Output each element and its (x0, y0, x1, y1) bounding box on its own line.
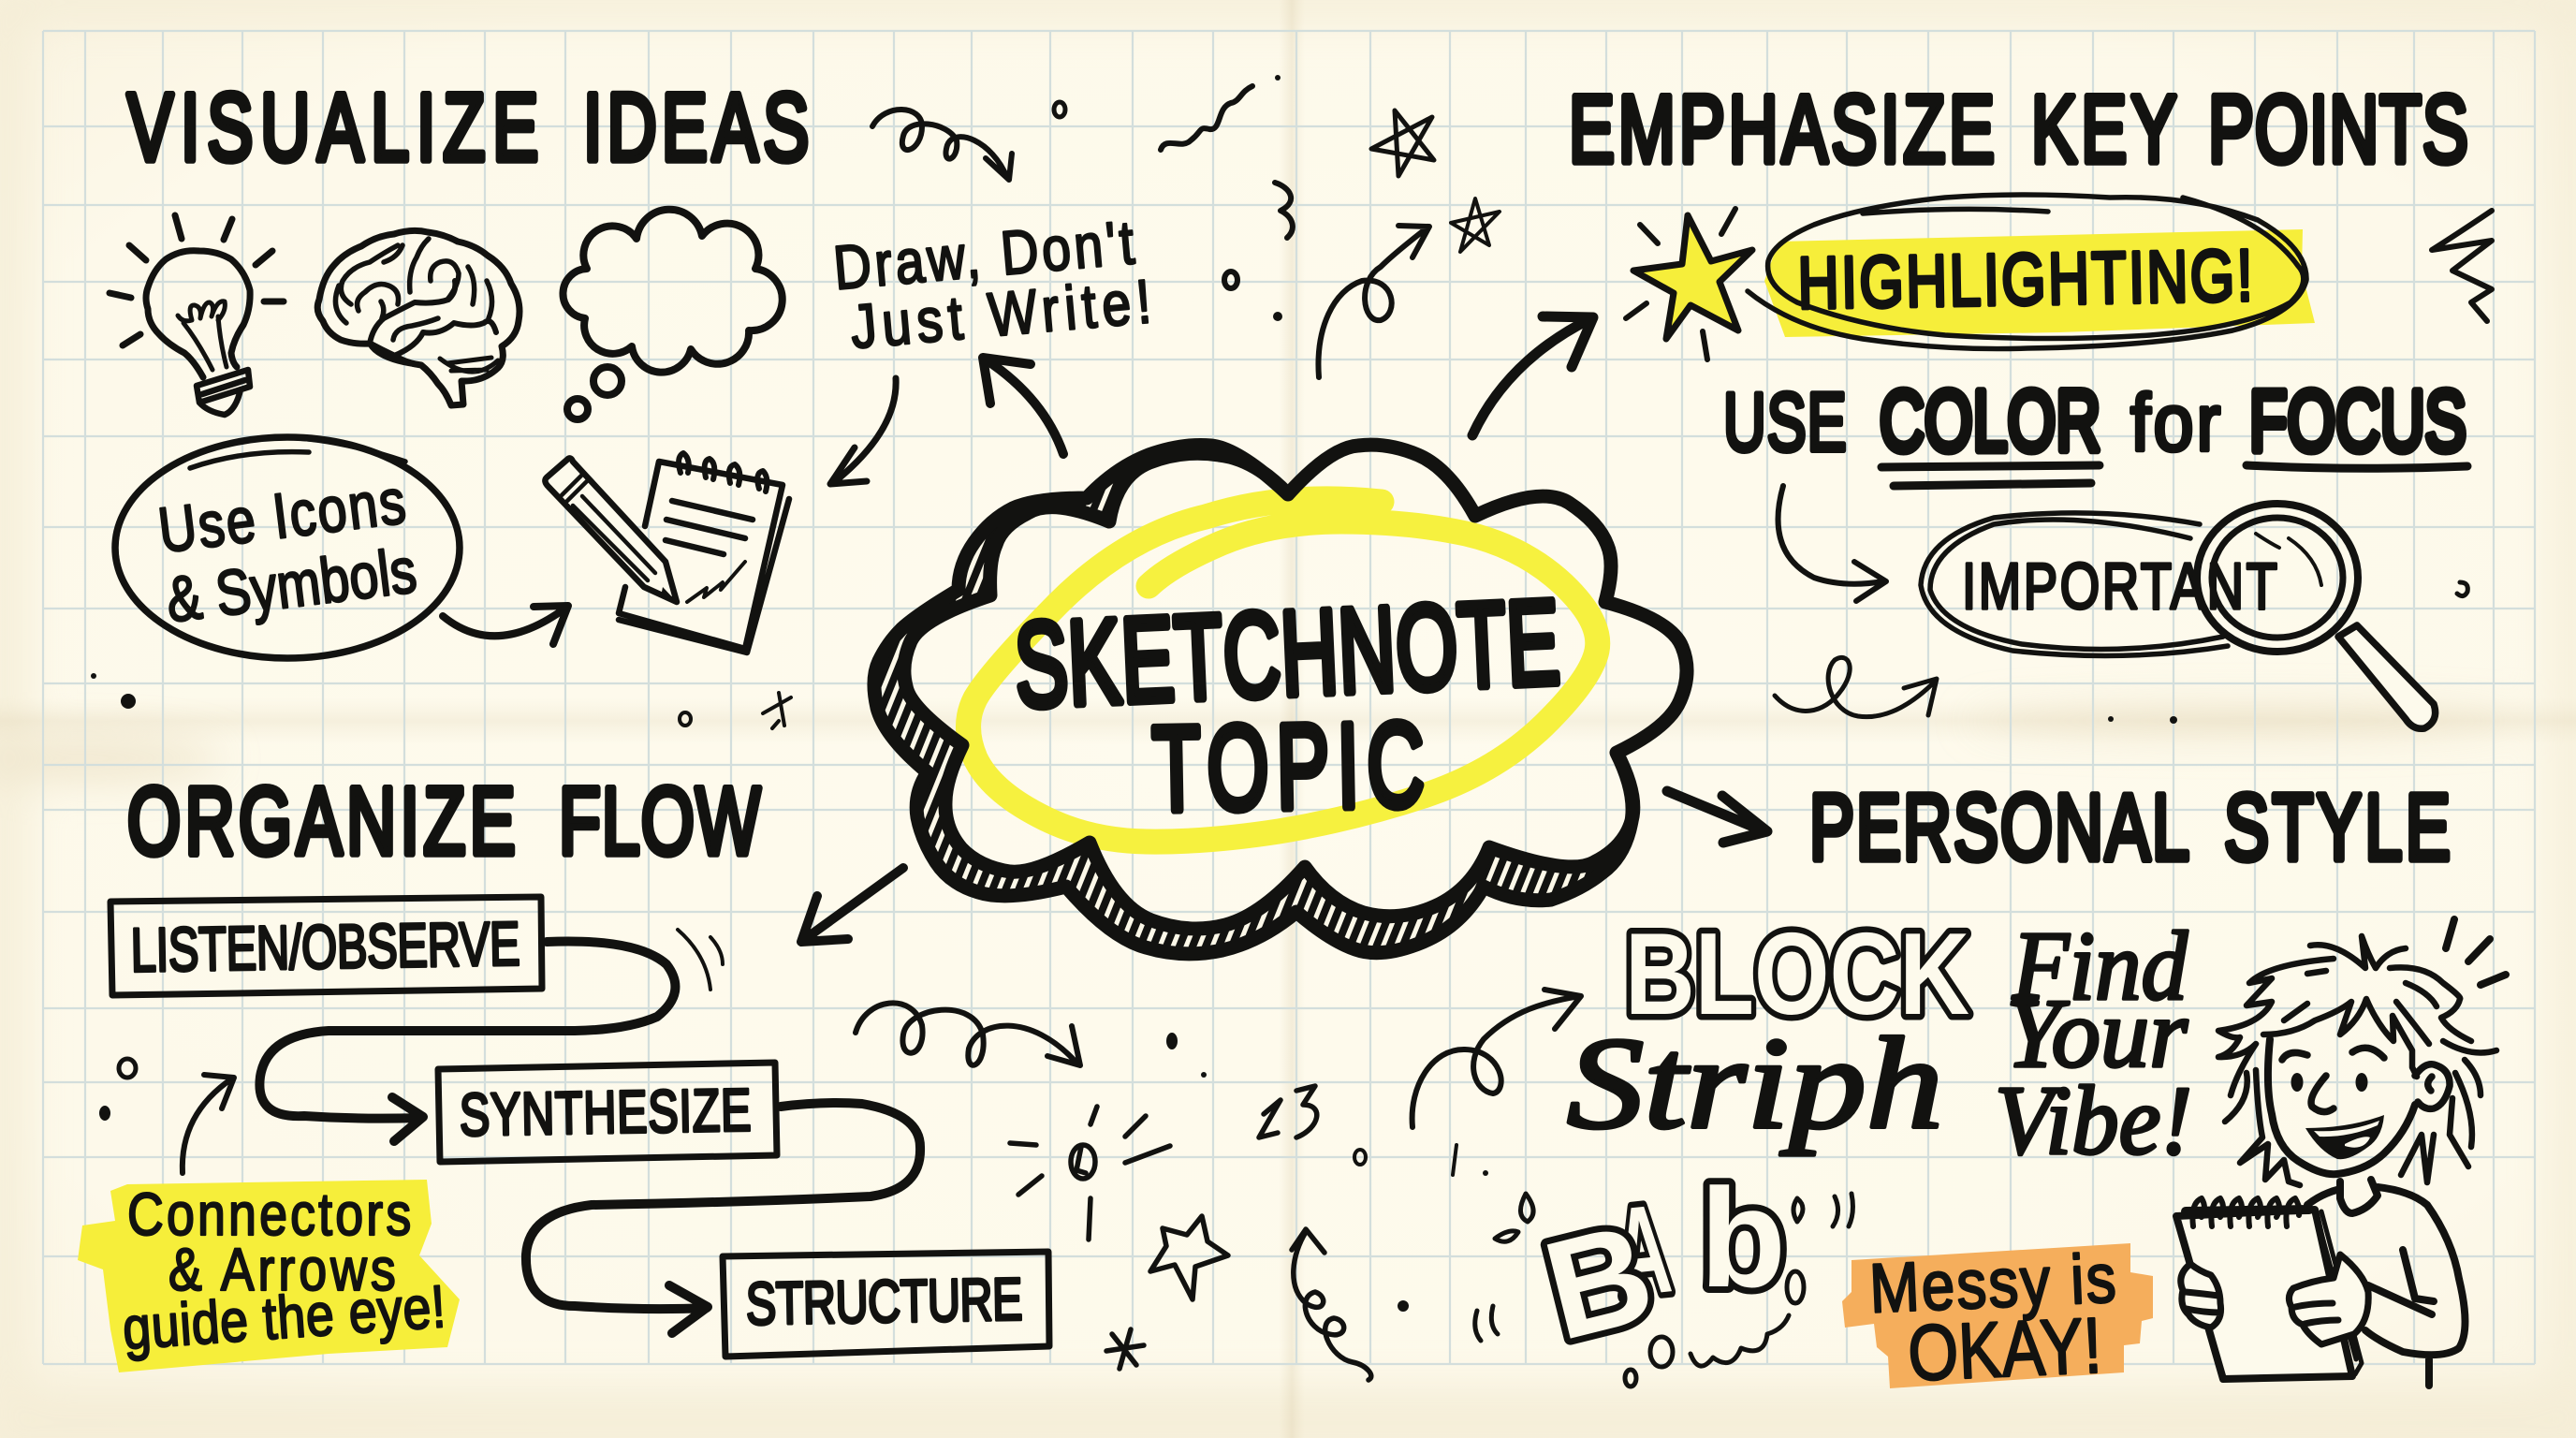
arrow: draw text to notepad (830, 378, 896, 484)
text: draw, don't just write (831, 208, 1153, 361)
arrow: callout pointer (183, 1075, 234, 1173)
icon: thought cloud (563, 210, 783, 419)
nose (2311, 1076, 2334, 1112)
face (2268, 1039, 2415, 1174)
callout: messy is okay (1842, 1240, 2153, 1398)
arrow: bubble to notepad (443, 606, 568, 644)
callout: connectors and arrows: Connectors (127, 1181, 411, 1248)
heading: personal style (1809, 775, 2451, 880)
notebook (2176, 1210, 2352, 1379)
text: draw, don't just write: Draw, Don't (831, 208, 1137, 302)
box: synthesize: SYNTHESIZE (459, 1078, 752, 1149)
doodles: right middle (1775, 582, 2467, 724)
heading: organize flow: ORGANIZE (127, 768, 516, 874)
callout bubble: use icons and symbols: & Symbols (163, 536, 420, 637)
yellow highlighter ring (968, 499, 1598, 842)
heading: use color for focus (1723, 372, 2467, 486)
box: listen/observe (110, 897, 542, 995)
lettering: find your vibe: Vibe! (1995, 1065, 2192, 1175)
lettering: script: Striph (1567, 1011, 1943, 1156)
callout bubble: use icons and symbols: Use Icons (154, 466, 409, 566)
mouth (2305, 1115, 2384, 1159)
box: structure (723, 1252, 1049, 1357)
callout bubble: use icons and symbols (115, 437, 460, 658)
doodles: top centre (872, 75, 1500, 377)
doodles: bottom centre burst, star, marks (1010, 1033, 1488, 1380)
hair (2218, 936, 2496, 1185)
title: TOPIC: TOPIC (1151, 697, 1426, 836)
doodle: loop arrow bottom centre (856, 1003, 1080, 1065)
spiral arrow (1292, 1229, 1371, 1380)
arrow: loop to block lettering (1412, 990, 1581, 1127)
heading: emphasize key points: EMPHASIZE (1569, 76, 1995, 183)
doodles: left dots (91, 673, 791, 728)
ear (2415, 1064, 2450, 1108)
icon: yellow star (1633, 215, 1752, 339)
asterisk (1106, 1329, 1144, 1369)
bubble splashes (1475, 1194, 1852, 1387)
left hand (2181, 1264, 2221, 1328)
callout: connectors and arrows (78, 1180, 460, 1372)
right hand (2289, 1255, 2368, 1344)
central cloud: sketchnote topic (874, 445, 1687, 954)
lettering: bubble letters: A (1607, 1177, 1676, 1324)
scribbled ellipse (1921, 513, 2228, 655)
heading: organize flow (127, 768, 760, 874)
arrow: focus to important (1778, 486, 1886, 601)
heading: visualize ideas: VISUALIZE (127, 74, 538, 181)
highlight group: star and highlighting (1626, 195, 2315, 360)
rays (2446, 919, 2506, 985)
lettering: find your vibe (1995, 911, 2192, 1175)
box: synthesize (438, 1063, 777, 1162)
character with notebook (2176, 919, 2506, 1386)
heading: emphasize key points (1569, 76, 2468, 183)
arrow: cloud to personal style (1667, 791, 1767, 843)
heading: emphasize key points: KEY (2031, 76, 2177, 183)
eyes (2291, 1073, 2303, 1092)
callout: messy is okay: OKAY! (1906, 1301, 2103, 1398)
motion arcs (678, 930, 723, 990)
notebook spiral (2186, 1210, 2309, 1211)
heading: personal style: PERSONAL (1809, 775, 2189, 880)
icon: brain (317, 230, 520, 405)
doodles: small marks left (99, 1059, 136, 1121)
lettering: bubble letters: B (1530, 1193, 1667, 1370)
arrow: cloud to organize flow (801, 868, 903, 942)
lettering: find your vibe: Find (2012, 911, 2188, 1020)
star rays (1626, 209, 1735, 360)
arrow: cloud to draw text (983, 358, 1063, 454)
text: important: IMPORTANT (1962, 550, 2277, 624)
icon: light bulb (110, 215, 284, 415)
flow diagram (110, 897, 1049, 1357)
callout: connectors and arrows: & Arrows (168, 1236, 396, 1303)
lettering: bubble letters: b (1700, 1159, 1786, 1316)
doodle: small star (1451, 198, 1500, 252)
heading: use color for focus: for (2130, 378, 2220, 468)
heading: visualize ideas: IDEAS (583, 74, 809, 181)
heading: use color for focus: FOCUS (2249, 372, 2466, 469)
heading: emphasize key points: POINTS (2208, 76, 2468, 183)
lettering: block: BLOCK (1625, 910, 1969, 1039)
lettering: find your vibe: Your (2006, 978, 2188, 1088)
heading: visualize ideas (127, 74, 809, 181)
callout: connectors and arrows: guide the eye! (121, 1272, 447, 1362)
doodle: loop arrow (1318, 226, 1429, 377)
icon: pencil and notepad (545, 453, 789, 653)
yellow marker block (1764, 229, 2315, 337)
box: listen/observe: LISTEN/OBSERVE (130, 909, 520, 985)
connector: synthesize to structure (526, 1103, 920, 1333)
title: SKETCHNOTE: SKETCHNOTE (1012, 575, 1562, 732)
cloud shadow hatch band (874, 445, 1687, 954)
scribbled ellipse (1748, 195, 2306, 349)
heading: use color for focus: COLOR (1880, 372, 2100, 469)
doodle: star (1371, 110, 1434, 176)
box: structure: STRUCTURE (745, 1267, 1023, 1338)
important ellipse with magnifier (1921, 504, 2436, 728)
doodle: loop arrow (1775, 657, 1937, 717)
doodle: zigzag (2432, 211, 2492, 321)
scrawl marks (1259, 1086, 1317, 1137)
burst (1071, 1145, 1095, 1179)
text: highlighting: HIGHLIGHTING! (1797, 235, 2253, 324)
text: draw, don't just write: Just Write! (848, 267, 1153, 361)
body (2307, 1180, 2466, 1386)
connector: listen to synthesize (259, 942, 675, 1141)
star (1150, 1216, 1228, 1299)
underlines (1881, 465, 2467, 486)
lettering: bubble letters (1475, 1159, 1852, 1387)
arrow: cloud to emphasize (1472, 316, 1593, 435)
heading: personal style: STYLE (2224, 775, 2451, 880)
icon: magnifying glass (2197, 504, 2436, 728)
heading: organize flow: FLOW (559, 768, 760, 874)
brows (2282, 1048, 2384, 1060)
heading: use color for focus: USE (1723, 377, 1847, 469)
callout: messy is okay: Messy is (1868, 1240, 2117, 1328)
